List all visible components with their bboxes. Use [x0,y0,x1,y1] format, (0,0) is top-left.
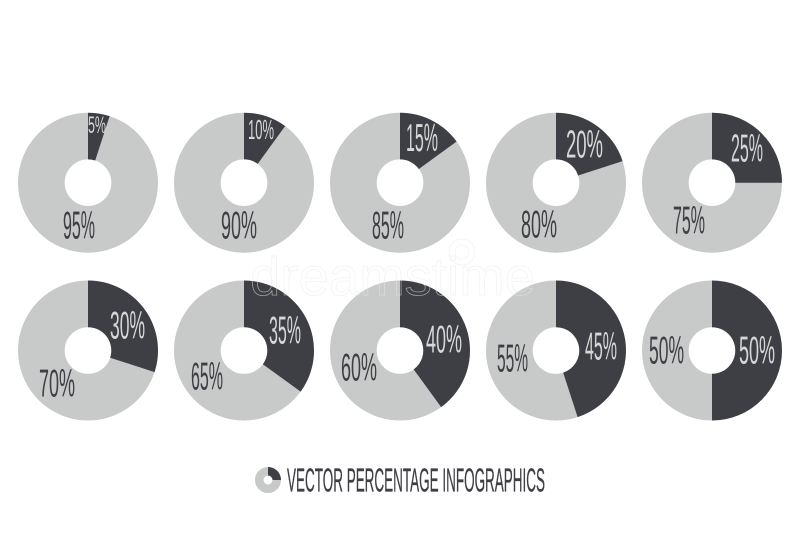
donut chart: 5% / 95% [41,112,135,248]
icon: small donut [259,467,281,489]
donut chart: 20% / 80%: 20% [566,124,603,166]
wedge: 35% [244,280,314,392]
donut chart: 50% / 50%: 50% [649,330,684,372]
donut chart: 35% / 65% [191,280,314,398]
donut chart: 5% / 95%: 95% [63,204,95,248]
wedge: 10% [244,113,285,164]
donut chart: 45% / 55%: 45% [585,326,617,368]
label: 5%: 5% [88,112,106,139]
donut chart: 10% / 90%: 10% [248,114,274,145]
donut chart: 30% / 70%: 30% [110,304,145,348]
donut chart: 10% / 90% [197,113,291,248]
wedge: 45% [556,280,626,417]
donut chart: 15% / 85%: 15% [406,117,438,160]
donut chart: 20% / 80% [509,113,623,246]
donut chart: 35% / 65%: 65% [191,356,223,398]
donut chart: 40% / 60%: 40% [426,318,462,362]
donut chart: 25% / 75% [665,113,782,242]
wedge: 40% [400,280,470,407]
donut chart: 20% / 80%: 80% [521,204,557,246]
donut chart: 45% / 55%: 55% [497,338,528,380]
donut chart: 30% / 70% [39,280,158,406]
donut chart: 30% / 70%: 70% [39,362,75,406]
watermark: dreamstime [250,247,535,307]
wedge: 25% [712,113,782,183]
donut chart: 45% / 55% [497,280,626,417]
donut chart: 50% / 50% [649,280,782,420]
wedge: 5% [88,113,110,161]
donut chart: 10% / 90%: 90% [221,204,257,248]
donut chart: 25% / 75%: 75% [673,200,705,242]
donut chart: 15% / 85% [353,113,457,248]
wedge: 15% [400,113,457,169]
donut chart: 40% / 60% [341,280,470,407]
wedge: 30% [88,280,158,372]
wedge: 50% [712,280,782,420]
donut chart: 15% / 85%: 85% [372,204,404,248]
donut chart: 35% / 65%: 35% [269,310,301,352]
wedge: 20% [556,113,623,176]
donut chart: 40% / 60%: 60% [341,346,377,390]
